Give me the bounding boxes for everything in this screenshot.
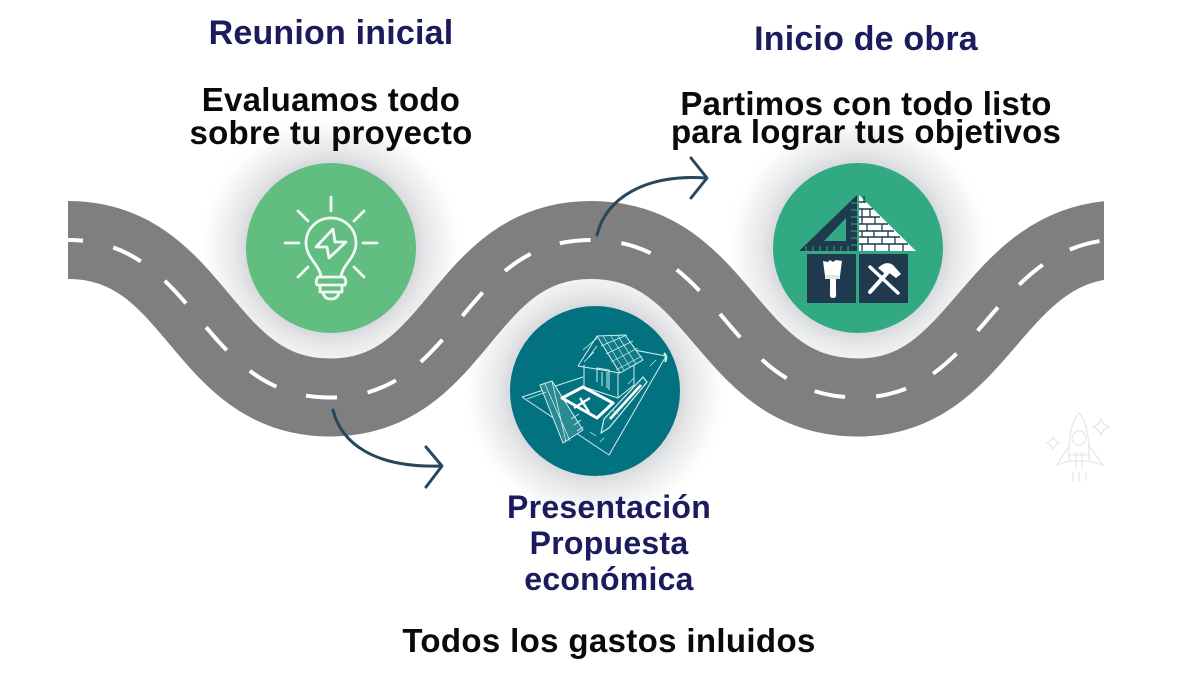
text: Partimos con todo listo: Partimos con todo listo xyxy=(680,85,1052,122)
text: Evaluamos todo sobre tu proyecto xyxy=(190,81,472,151)
step 2 circle xyxy=(510,306,680,476)
icon: light bulb xyxy=(285,197,377,299)
step 2 glow xyxy=(460,256,730,526)
heading: Inicio de obra: Inicio de obra xyxy=(754,20,978,58)
text: Presentacion Propuesta economica xyxy=(507,489,711,597)
text: Todos los gastos incluidos note: Todos los gastos inluidos xyxy=(402,622,816,659)
text: Presentacion Propuesta economica: Presentación xyxy=(507,489,711,525)
icon: rocket watermark xyxy=(1047,413,1109,482)
text: Evaluamos todo sobre tu proyecto: sobre tu proyecto xyxy=(190,114,472,151)
text: Partimos con todo listo xyxy=(671,85,1061,150)
step 3 glow xyxy=(723,113,993,383)
step 1 glow xyxy=(196,113,466,383)
text: Partimos con todo listo: para lograr tus objetivos xyxy=(671,113,1061,150)
arrow: road to project start xyxy=(597,158,707,235)
heading: Reunion inicial: Reunion inicial xyxy=(209,14,453,52)
step 3 circle xyxy=(773,163,943,333)
text: Evaluamos todo sobre tu proyecto: Evaluamos todo xyxy=(202,81,460,118)
icon: house with tools xyxy=(799,195,916,303)
winding road xyxy=(68,239,1125,398)
text: Presentacion Propuesta economica: económica xyxy=(524,561,694,597)
arrow: road to presentation xyxy=(333,410,442,487)
infographic artwork: road, circles, arrows and icons xyxy=(68,131,1110,508)
text: Presentacion Propuesta economica: Propuesta xyxy=(530,525,688,561)
step 1 circle xyxy=(246,163,416,333)
icon: house blueprint xyxy=(522,335,666,455)
